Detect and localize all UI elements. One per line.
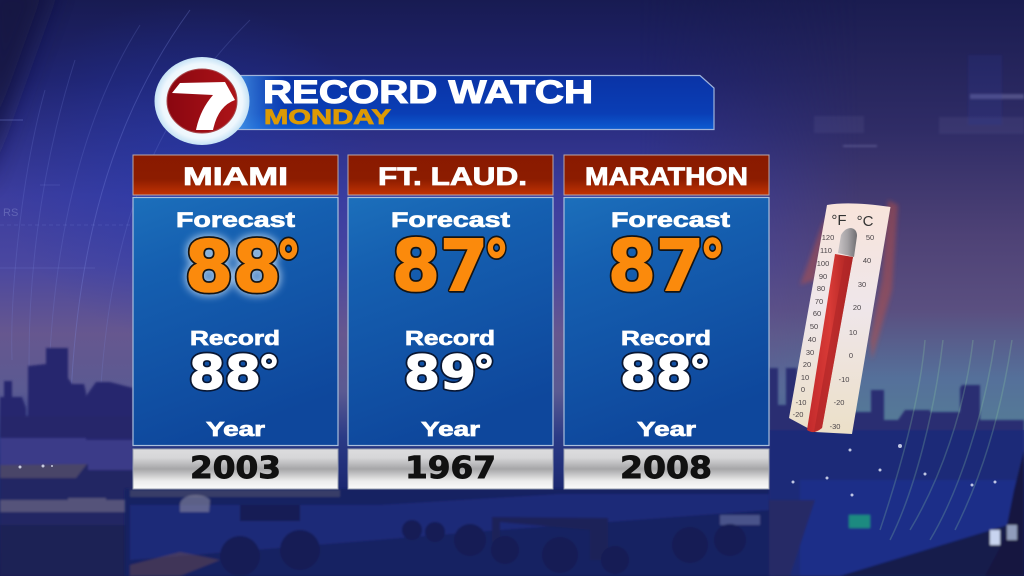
card: miami values: Record [190, 328, 280, 350]
card: marathon values: ° [700, 228, 725, 298]
thermometer scale labels: 110 [820, 246, 832, 255]
panel: miami [133, 155, 338, 489]
thermometer scale labels: -20 [793, 410, 803, 419]
card: marathon values: 88 [620, 346, 692, 401]
background: right hud bars [814, 55, 1024, 147]
card: ft. laud. values: 89 [404, 346, 476, 401]
card: miami values: ° [276, 229, 301, 299]
thermometer scale labels: 30 [806, 348, 814, 357]
card: marathon values: Record [621, 328, 711, 350]
header: marathon [564, 155, 769, 195]
header: marathon: MARATHON [585, 163, 748, 191]
thermometer scale labels: 80 [817, 284, 825, 293]
background: right light streaks [880, 340, 1012, 540]
card: marathon values: ° [689, 347, 711, 396]
thermometer scale labels: 30 [858, 280, 866, 289]
card: marathon values: ° [700, 228, 725, 298]
card: ft. laud. values: 87 [392, 225, 488, 307]
card: miami values: Forecast [176, 209, 295, 232]
footer: 2003: 2003 [190, 451, 281, 486]
panel: ft. laud. [348, 155, 553, 489]
thermometer scale labels [793, 212, 874, 431]
card: ft. laud. values: ° [473, 347, 495, 396]
card: miami values: 88 [185, 226, 281, 308]
subheading: monday: MONDAY [264, 105, 391, 129]
header: miami: MIAMI [183, 163, 288, 191]
heading: record watch: RECORD WATCH [263, 74, 593, 110]
card: ft. laud. values: Year [421, 419, 480, 441]
background: right skyline [769, 368, 1024, 576]
card: miami values: 88 [189, 346, 261, 401]
thermometer scale labels: 50 [810, 322, 818, 331]
footer: 1967: 1967 [405, 451, 496, 486]
footer: 2008: 2008 [620, 451, 712, 486]
thermometer scale labels: 0 [801, 385, 805, 394]
banner: record watch [225, 74, 714, 130]
footer: 2003 [133, 449, 338, 489]
card: marathon values [564, 198, 769, 446]
thermometer scale labels: 40 [863, 256, 871, 265]
card: ft. laud. values: Record [405, 328, 495, 350]
panel: marathon [564, 155, 769, 489]
thermometer scale labels: 40 [808, 335, 816, 344]
thermometer scale labels: 20 [803, 360, 811, 369]
card: miami values: Year [206, 419, 265, 441]
card: marathon values: Forecast [611, 209, 730, 232]
card: miami values: ° [258, 347, 280, 396]
footer: 1967 [348, 449, 553, 489]
thermometer scale labels: -10 [796, 398, 806, 407]
header: ft. laud.: FT. LAUD. [378, 163, 527, 191]
card: ft. laud. values: Forecast [391, 209, 510, 232]
thermometer scale labels: 50 [866, 233, 874, 242]
card: miami values: 88 [189, 346, 261, 401]
background: left hud arcs [0, 10, 250, 420]
card: ft. laud. values: 87 [392, 225, 488, 307]
header: ft. laud. [348, 155, 553, 195]
card: ft. laud. values: ° [484, 228, 509, 298]
card: marathon values: Year [637, 419, 696, 441]
thermometer scale labels: °F [831, 212, 847, 229]
card: miami values [133, 198, 338, 446]
icon: thermometer [789, 200, 898, 434]
thermometer scale labels: °C [857, 213, 874, 230]
header: miami [133, 155, 338, 195]
thermometer scale labels: 10 [849, 328, 857, 337]
footer: 2008 [564, 449, 769, 489]
card: marathon values: 87 [608, 225, 704, 307]
card: miami values: ° [258, 347, 280, 396]
thermometer scale labels: 120 [822, 233, 834, 242]
background: hud label: RS [3, 207, 18, 219]
thermometer scale labels: 70 [815, 297, 823, 306]
thermometer tube [807, 228, 857, 432]
thermometer scale labels: -30 [830, 422, 840, 431]
thermometer scale labels: 60 [813, 309, 821, 318]
card: marathon values: ° [689, 347, 711, 396]
card: ft. laud. values: 89 [404, 346, 476, 401]
thermometer scale labels: 0 [849, 351, 853, 360]
card: ft. laud. values: ° [473, 347, 495, 396]
card: miami values: ° [276, 229, 301, 299]
card: ft. laud. values [348, 198, 553, 446]
thermometer scale labels: -10 [839, 375, 849, 384]
thermometer scale labels: -20 [834, 398, 844, 407]
background: city lights [18, 444, 996, 496]
thermometer scale labels: 100 [817, 259, 829, 268]
thermometer scale labels: 10 [801, 373, 809, 382]
thermometer scale labels: 90 [819, 272, 827, 281]
card: marathon values: 87 [608, 225, 704, 307]
background: city ground lower [125, 489, 775, 576]
card: miami values: 88 [185, 226, 281, 308]
card: miami values: 88 [185, 226, 281, 308]
icon: channel 7 logo [154, 57, 250, 145]
card: ft. laud. values: ° [484, 228, 509, 298]
card: marathon values: 88 [620, 346, 692, 401]
thermometer scale labels: 20 [853, 303, 861, 312]
background: left skyline [0, 348, 133, 576]
